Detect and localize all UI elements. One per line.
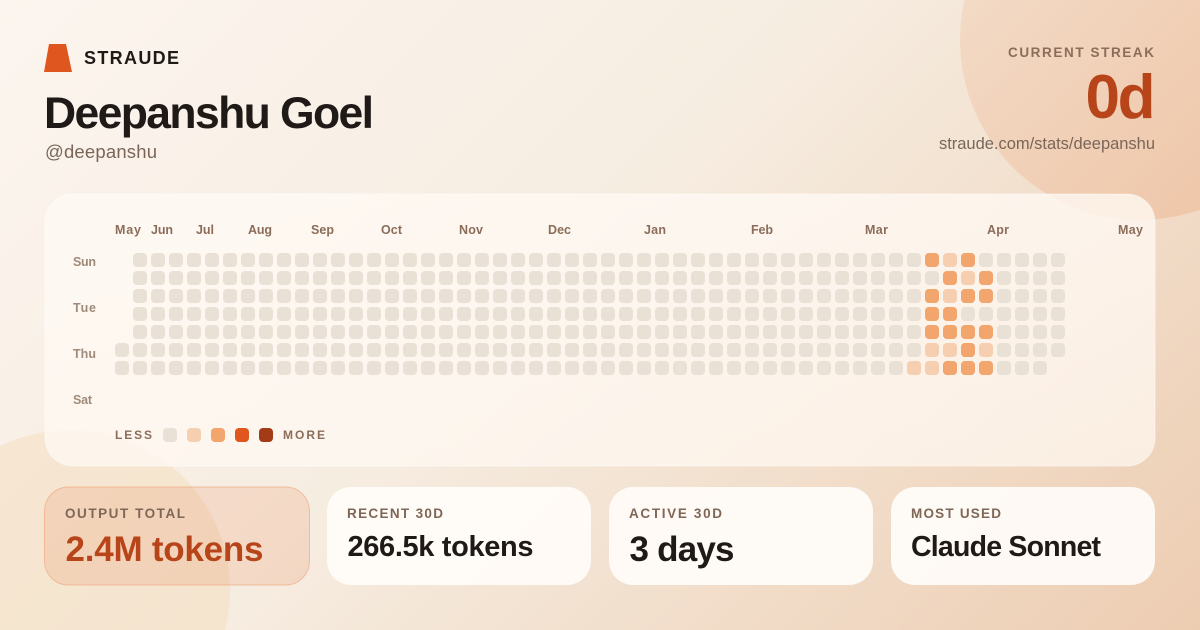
card label: RECENT 30D (347, 506, 443, 521)
streak label: CURRENT STREAK (1008, 45, 1154, 60)
user handle: @deepanshu (45, 141, 157, 162)
month labels: Nov (459, 223, 483, 237)
card value: Claude Sonnet (911, 531, 1102, 563)
month labels: Mar (865, 223, 888, 237)
decorative circle: bottom left (0, 430, 230, 630)
weekday labels: Thu (73, 347, 96, 361)
stat card: active 30d (609, 487, 873, 585)
month labels: May (115, 223, 141, 237)
profile url: straude.com/stats/deepanshu (939, 135, 1155, 153)
title: user name: Deepanshu Goel (44, 89, 374, 138)
weekday labels: Sat (73, 393, 93, 407)
stat card: output total (44, 487, 310, 585)
month labels (115, 223, 1143, 237)
panel: contribution heatmap (45, 194, 1155, 466)
heatmap grid (115, 253, 1069, 379)
card value: 3 days (630, 530, 734, 569)
legend: MORE (283, 428, 325, 442)
month labels: Dec (548, 223, 571, 237)
stat card: most used (891, 487, 1155, 585)
month labels: Jan (644, 223, 666, 237)
month labels: Feb (751, 223, 773, 237)
streak value: 0d (1086, 63, 1156, 132)
month labels: Apr (987, 223, 1009, 237)
card value: 2.4M tokens (66, 530, 264, 569)
decorative circle: top right (960, 0, 1200, 220)
month labels: Sep (311, 223, 334, 237)
card label: OUTPUT TOTAL (65, 506, 185, 521)
month labels: May (1118, 223, 1143, 237)
legend: LESS (115, 428, 152, 442)
weekday labels (73, 255, 96, 407)
month labels: Oct (381, 223, 403, 237)
legend (115, 428, 325, 442)
current streak block (939, 45, 1156, 153)
month labels: Jul (196, 223, 214, 237)
card label: ACTIVE 30D (629, 506, 722, 521)
month labels: Aug (248, 223, 272, 237)
wordmark: STRAUDE (84, 48, 179, 68)
icon: trapezoid logo (44, 44, 72, 72)
weekday labels: Tue (73, 301, 96, 315)
month labels: Jun (151, 223, 173, 237)
brand logo and wordmark (44, 44, 179, 72)
stat card: recent 30d (327, 487, 591, 585)
weekday labels: Sun (73, 255, 96, 269)
card value: 266.5k tokens (348, 531, 534, 563)
card label: MOST USED (911, 506, 1001, 521)
